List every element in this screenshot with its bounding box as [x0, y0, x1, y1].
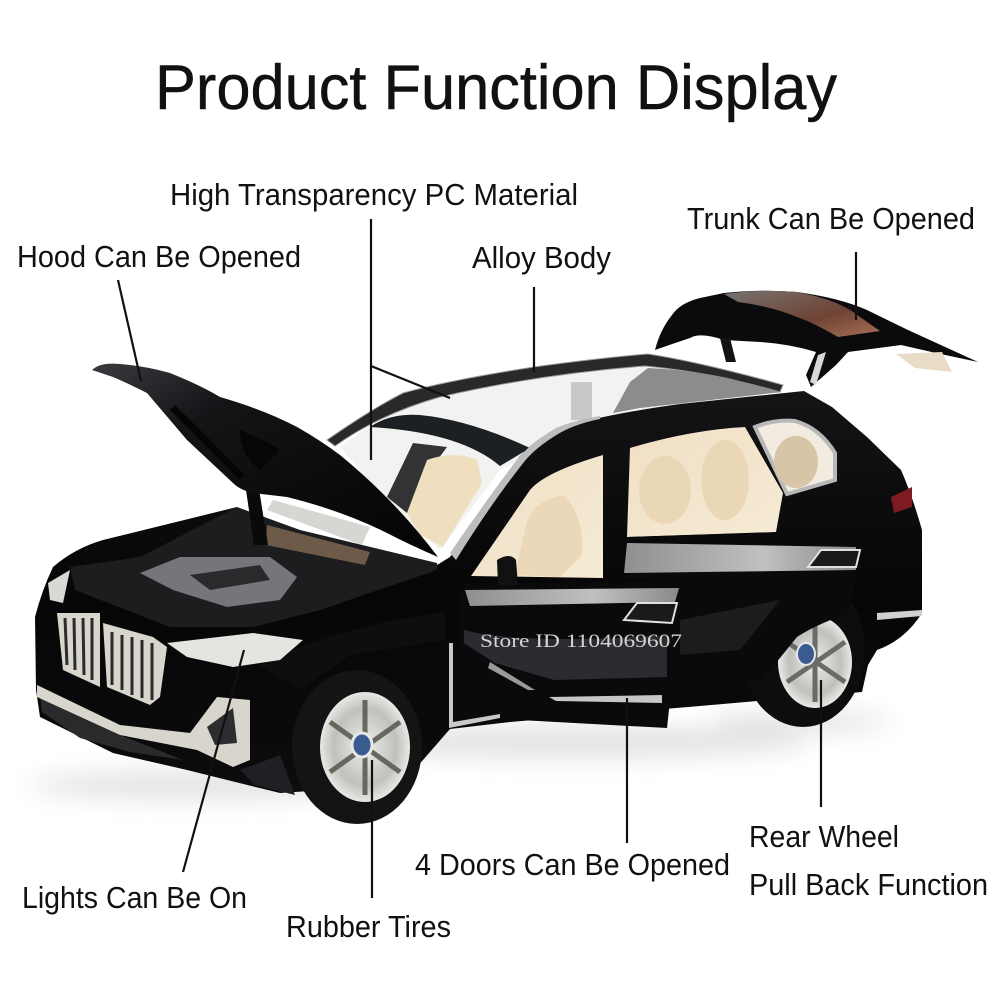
car: A-pillar chrome — [450, 416, 600, 560]
label: rubber tires: Rubber Tires — [286, 909, 451, 944]
car: front seat shading — [515, 495, 582, 577]
car illustration — [30, 291, 978, 824]
car: rear side glass — [613, 368, 782, 413]
label: 4 doors can be opened: 4 Doors Can Be Opened — [415, 847, 730, 882]
car: watermark: Store ID 1104069607 — [480, 631, 682, 652]
label: trunk can be opened: Trunk Can Be Opened — [687, 201, 975, 236]
car: rear bumper line — [877, 610, 922, 620]
label: lights can be on — [22, 650, 247, 915]
car: front open door — [460, 556, 683, 728]
car: door jamb chrome — [449, 643, 500, 728]
car: lower bumper — [37, 685, 250, 767]
label: high transparency PC material: High Transparency PC Material — [170, 177, 578, 212]
car: rear door opening — [627, 427, 783, 537]
car: seat in windshield — [387, 443, 482, 547]
label: alloy body — [472, 240, 611, 372]
label: hood can be opened — [17, 239, 301, 381]
car: rear open door — [624, 530, 860, 680]
car: under-hood panel — [245, 483, 370, 565]
car: front fender highlight — [260, 612, 445, 690]
car: headlight — [167, 633, 303, 667]
label: hood can be opened: Hood Can Be Opened — [17, 239, 301, 274]
car: ground shadow — [30, 712, 890, 799]
car: rear wheel — [741, 573, 865, 727]
car: windshield header band — [370, 415, 530, 466]
label: alloy body: Alloy Body — [472, 240, 611, 275]
car: main body — [35, 391, 922, 793]
car: lower front fender — [240, 755, 295, 795]
car: roof rail — [327, 354, 783, 446]
label: rear wheel pull back function: Rear Wheel — [749, 819, 899, 854]
car: rear window — [755, 421, 835, 494]
label: rear wheel pull back function — [749, 680, 988, 902]
label: lights can be on: Lights Can Be On — [22, 880, 247, 915]
car: front wheel — [292, 670, 422, 824]
car: tail light — [891, 487, 912, 513]
car: roof pillar — [571, 382, 592, 420]
car: trunk lid — [655, 291, 978, 387]
label: high transparency PC material — [170, 177, 578, 460]
car: rear seat shading — [639, 440, 749, 524]
label: rear wheel pull back function: Pull Back Function — [749, 867, 988, 902]
car: left headlight — [48, 570, 70, 603]
car: engine bay — [70, 507, 437, 627]
car: hood — [92, 364, 438, 557]
car: front grille — [57, 613, 167, 705]
car: front door opening — [471, 455, 603, 578]
title: Product Function Display — [155, 53, 837, 123]
car: roof glass — [340, 364, 780, 550]
